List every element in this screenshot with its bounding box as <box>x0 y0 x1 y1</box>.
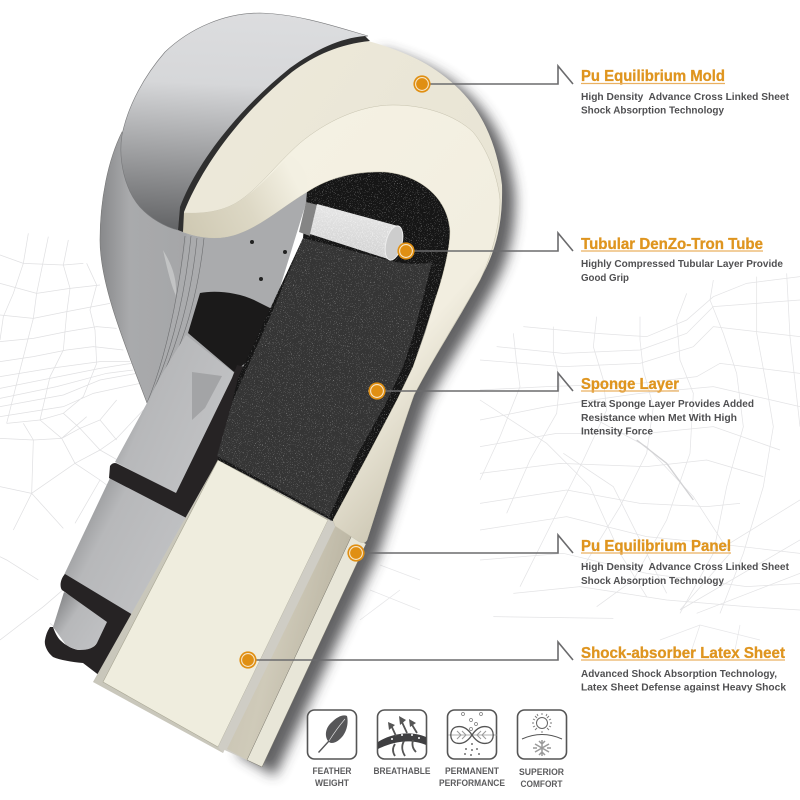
vent holes <box>250 240 287 281</box>
description: Resistance when Met With High <box>581 412 737 424</box>
callout: Tubular DenZo-Tron Tube <box>397 233 783 284</box>
label: WEIGHT <box>315 778 349 788</box>
icon: breathable <box>374 710 430 776</box>
icon: feather weight <box>308 710 356 788</box>
strip backing <box>218 520 366 767</box>
sponge layer <box>217 172 450 521</box>
white sheen on shell <box>163 250 176 296</box>
mold outer <box>180 41 502 543</box>
leader line <box>256 642 573 660</box>
tube body <box>310 204 398 260</box>
description: Highly Compressed Tubular Layer Provide <box>581 258 783 270</box>
shell seam lines <box>147 236 204 403</box>
callout: Pu Equilibrium Panel <box>347 535 789 587</box>
label: BREATHABLE <box>374 766 430 776</box>
callout: Sponge Layer <box>368 373 754 438</box>
black inner lining <box>188 292 274 372</box>
marker dot <box>368 382 386 400</box>
label: SUPERIOR <box>519 767 564 777</box>
heading: Tubular DenZo-Tron Tube <box>581 236 763 253</box>
wrist grey section <box>64 478 196 618</box>
cream mold <box>180 41 502 543</box>
description <box>581 561 789 587</box>
label <box>519 767 564 789</box>
lower palm grey panel <box>115 335 238 494</box>
tubular tube <box>299 202 406 262</box>
back shell body <box>100 132 262 405</box>
tan edge strip <box>227 525 352 760</box>
description: Shock Absorption Technology <box>581 575 724 587</box>
heading: Pu Equilibrium Mold <box>581 68 725 85</box>
flap dark edge <box>178 36 370 232</box>
heading: Pu Equilibrium Panel <box>581 538 731 555</box>
marker dot <box>347 544 365 562</box>
marker dot <box>413 75 431 93</box>
panel crease <box>192 372 222 420</box>
cream edge strip <box>247 535 366 767</box>
description: High Density Advance Cross Linked Sheet <box>581 561 789 573</box>
leader line <box>385 373 573 391</box>
background wireframe mesh: right <box>480 273 800 618</box>
icon: permanent performance <box>439 710 505 788</box>
description <box>581 91 789 116</box>
description: Shock Absorption Technology <box>581 104 724 116</box>
glove illustration <box>45 13 515 776</box>
lower strap and cuff <box>45 574 138 676</box>
description <box>581 398 754 438</box>
dark binding strap <box>109 365 264 525</box>
callout: Shock-absorber Latex Sheet <box>239 642 786 694</box>
callout: Pu Equilibrium Mold <box>413 66 789 116</box>
description: High Density Advance Cross Linked Sheet <box>581 91 789 103</box>
top back flap <box>121 13 368 230</box>
label: COMFORT <box>520 779 563 789</box>
label <box>312 766 352 788</box>
panel side strip <box>218 520 337 753</box>
background wireframe mesh: left <box>0 233 143 650</box>
description: Advanced Shock Absorption Technology, <box>581 668 777 680</box>
tube end cap <box>382 224 406 262</box>
description: Intensity Force <box>581 426 653 438</box>
description: Latex Sheet Defense against Heavy Shock <box>581 682 786 694</box>
shock absorber latex panel <box>93 460 330 753</box>
description: Extra Sponge Layer Provides Added <box>581 398 754 410</box>
marker dot <box>397 242 415 260</box>
background wireframe mesh: lower centre-right <box>360 565 760 655</box>
leader line <box>414 233 573 251</box>
cuff inner <box>53 592 124 650</box>
label: PERMANENT <box>445 766 499 776</box>
tube base <box>299 202 318 236</box>
description <box>581 258 783 284</box>
label: FEATHER <box>312 766 352 776</box>
glove drop shadow <box>238 50 515 776</box>
sponge core <box>217 238 432 517</box>
icon: superior comfort <box>518 710 566 789</box>
label <box>439 766 505 788</box>
leader line <box>364 535 573 553</box>
description: Good Grip <box>581 272 629 284</box>
description <box>581 668 786 694</box>
leader line <box>430 66 573 84</box>
label: PERFORMANCE <box>439 778 505 788</box>
inner palm panel <box>130 190 310 495</box>
mold underside lip <box>183 155 308 238</box>
sponge dark rim <box>218 172 450 521</box>
heading: Shock-absorber Latex Sheet <box>581 645 785 662</box>
heading: Sponge Layer <box>581 376 679 393</box>
marker dot <box>239 651 257 669</box>
mold inner lighter band <box>183 105 500 543</box>
